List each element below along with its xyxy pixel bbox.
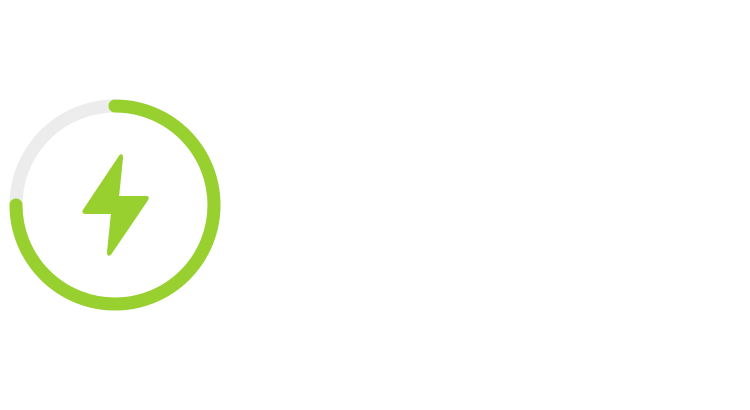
ring track	[16, 106, 214, 304]
icon: lightning bolt	[83, 155, 148, 255]
progress arc	[16, 106, 214, 304]
